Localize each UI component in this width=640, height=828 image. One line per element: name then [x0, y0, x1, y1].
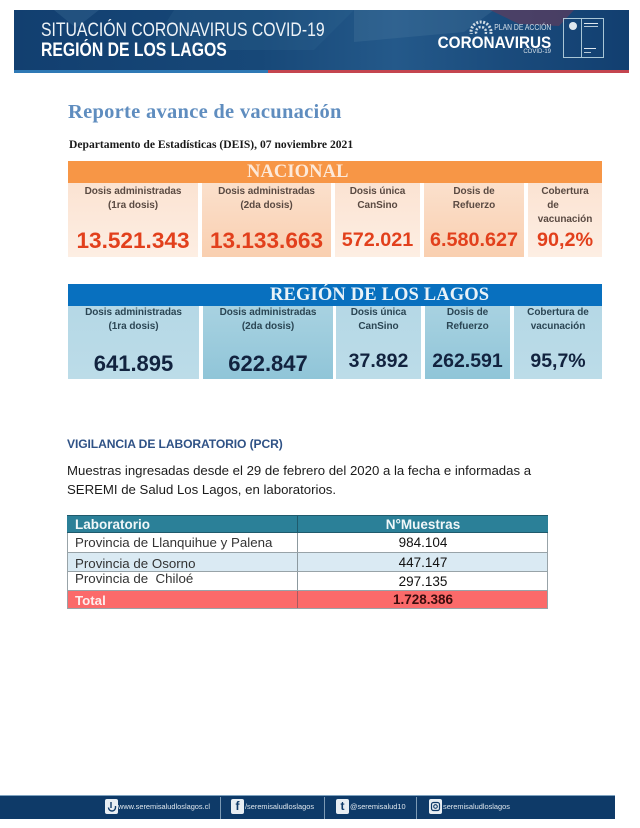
nacional heading: [68, 161, 602, 183]
footer twitter: @seremisalud10: [350, 802, 406, 811]
nacional cobertura: [528, 183, 602, 257]
region 1ra dosis: (1ra dosis): [108, 321, 159, 332]
nacional refuerzo: [424, 183, 524, 257]
region cobertura: vacunación: [531, 321, 585, 332]
nacional 1ra dosis: [68, 183, 198, 257]
row osorno: [67, 553, 548, 572]
panel: nacional: [68, 161, 602, 257]
nacional refuerzo: 6.580.627: [430, 229, 518, 251]
region cobertura: Cobertura de: [527, 307, 589, 318]
region cansino: [336, 306, 421, 379]
logo: plan de accion coronavirus: [437, 20, 551, 55]
nacional refuerzo: Dosis de: [453, 186, 495, 197]
icon: facebook: [231, 799, 244, 814]
region cansino: Dosis única: [351, 307, 406, 318]
icon: facebook: f: [236, 799, 240, 813]
footer facebook: /seremisaludloslagos: [245, 802, 314, 811]
region cobertura: 95,7%: [530, 350, 586, 372]
table: laboratorio muestras: [67, 515, 548, 609]
footer bar: [0, 795, 615, 819]
region 1ra dosis: Dosis administradas: [85, 307, 182, 318]
header banner: [14, 10, 629, 73]
region refuerzo: Dosis de: [447, 307, 488, 318]
table header: [67, 515, 548, 533]
row total: [67, 591, 548, 609]
row llanquihue: [67, 533, 548, 553]
icon: twitter: t: [340, 799, 344, 813]
row osorno: 447.147: [399, 555, 447, 570]
region refuerzo: Refuerzo: [446, 321, 489, 332]
region cobertura: [514, 306, 602, 379]
vigilancia description: SEREMI de Salud Los Lagos, en laboratorios.: [67, 482, 336, 497]
row llanquihue: Provincia de Llanquihue y Palena: [75, 535, 272, 550]
nacional cansino: CanSino: [357, 200, 398, 211]
nacional cansino: Dosis única: [350, 186, 405, 197]
region 2da dosis: 622.847: [228, 351, 308, 376]
logo main text: CORONAVIRUS: [437, 33, 551, 52]
region 2da dosis: [203, 306, 333, 379]
nacional 2da dosis: 13.133.663: [210, 228, 323, 253]
footer web: www.seremisaludloslagos.cl: [118, 802, 210, 811]
nacional cansino: [335, 183, 420, 257]
nacional 1ra dosis: 13.521.343: [76, 228, 190, 253]
row chiloe: Provincia de Chiloé: [75, 571, 193, 586]
stripe: [14, 70, 268, 73]
icon: instagram: [429, 799, 442, 814]
vigilancia heading: VIGILANCIA DE LABORATORIO (PCR): [67, 437, 283, 451]
region refuerzo: [425, 306, 510, 379]
row osorno: Provincia de Osorno: [75, 556, 195, 571]
icon: twitter: [336, 799, 349, 814]
region 1ra dosis: [68, 306, 199, 379]
logo small text: PLAN DE ACCIÓN: [494, 22, 551, 32]
nacional cobertura: vacunación: [538, 214, 592, 225]
header title line 2: REGIÓN DE LOS LAGOS: [41, 40, 227, 61]
icon: virus dots: [470, 20, 492, 34]
table header: Laboratorio: [75, 517, 150, 532]
flag texture: [54, 10, 574, 42]
region heading: [68, 284, 602, 306]
nacional 1ra dosis: Dosis administradas: [85, 186, 181, 197]
nacional 2da dosis: (2da dosis): [240, 200, 293, 211]
nacional cobertura: de: [547, 200, 559, 211]
nacional 1ra dosis: (1ra dosis): [108, 200, 158, 211]
region 1ra dosis: 641.895: [94, 351, 173, 376]
vigilancia description: Muestras ingresadas desde el 29 de febrero del 2020 a la fecha e informadas a: [67, 463, 531, 478]
icon: web: [105, 799, 118, 814]
row total: 1.728.386: [393, 592, 453, 607]
region heading: REGIÓN DE LOS LAGOS: [270, 285, 489, 305]
header title line 1: SITUACIÓN CORONAVIRUS COVID-19: [41, 20, 325, 41]
nacional cansino: 572.021: [342, 229, 413, 251]
row llanquihue: 984.104: [399, 535, 447, 550]
table header: N°Muestras: [386, 517, 460, 532]
footer instagram: seremisaludloslagos: [443, 802, 510, 811]
report title: Reporte avance de vacunación: [68, 101, 342, 123]
region 2da dosis: (2da dosis): [242, 321, 294, 332]
nacional 2da dosis: [202, 183, 331, 257]
report subtitle: Departamento de Estadísticas (DEIS), 07 noviembre 2021: [69, 138, 353, 151]
row total: Total: [75, 593, 106, 608]
nacional heading: NACIONAL: [247, 162, 349, 182]
region 2da dosis: Dosis administradas: [220, 307, 316, 318]
panel: region de los lagos: [68, 284, 602, 379]
logo: ministry seal: [563, 18, 604, 58]
row chiloe: 297.135: [399, 574, 447, 589]
nacional refuerzo: Refuerzo: [453, 200, 495, 211]
vigilancia description: [67, 463, 532, 497]
logo covid text: COVID-19: [523, 49, 551, 55]
region cansino: CanSino: [358, 321, 399, 332]
region cansino: 37.892: [349, 350, 408, 372]
region refuerzo: 262.591: [432, 350, 503, 372]
nacional cobertura: 90,2%: [537, 229, 593, 251]
row chiloe: [67, 572, 548, 591]
nacional cobertura: Cobertura: [541, 186, 589, 197]
nacional 2da dosis: Dosis administradas: [218, 186, 315, 197]
